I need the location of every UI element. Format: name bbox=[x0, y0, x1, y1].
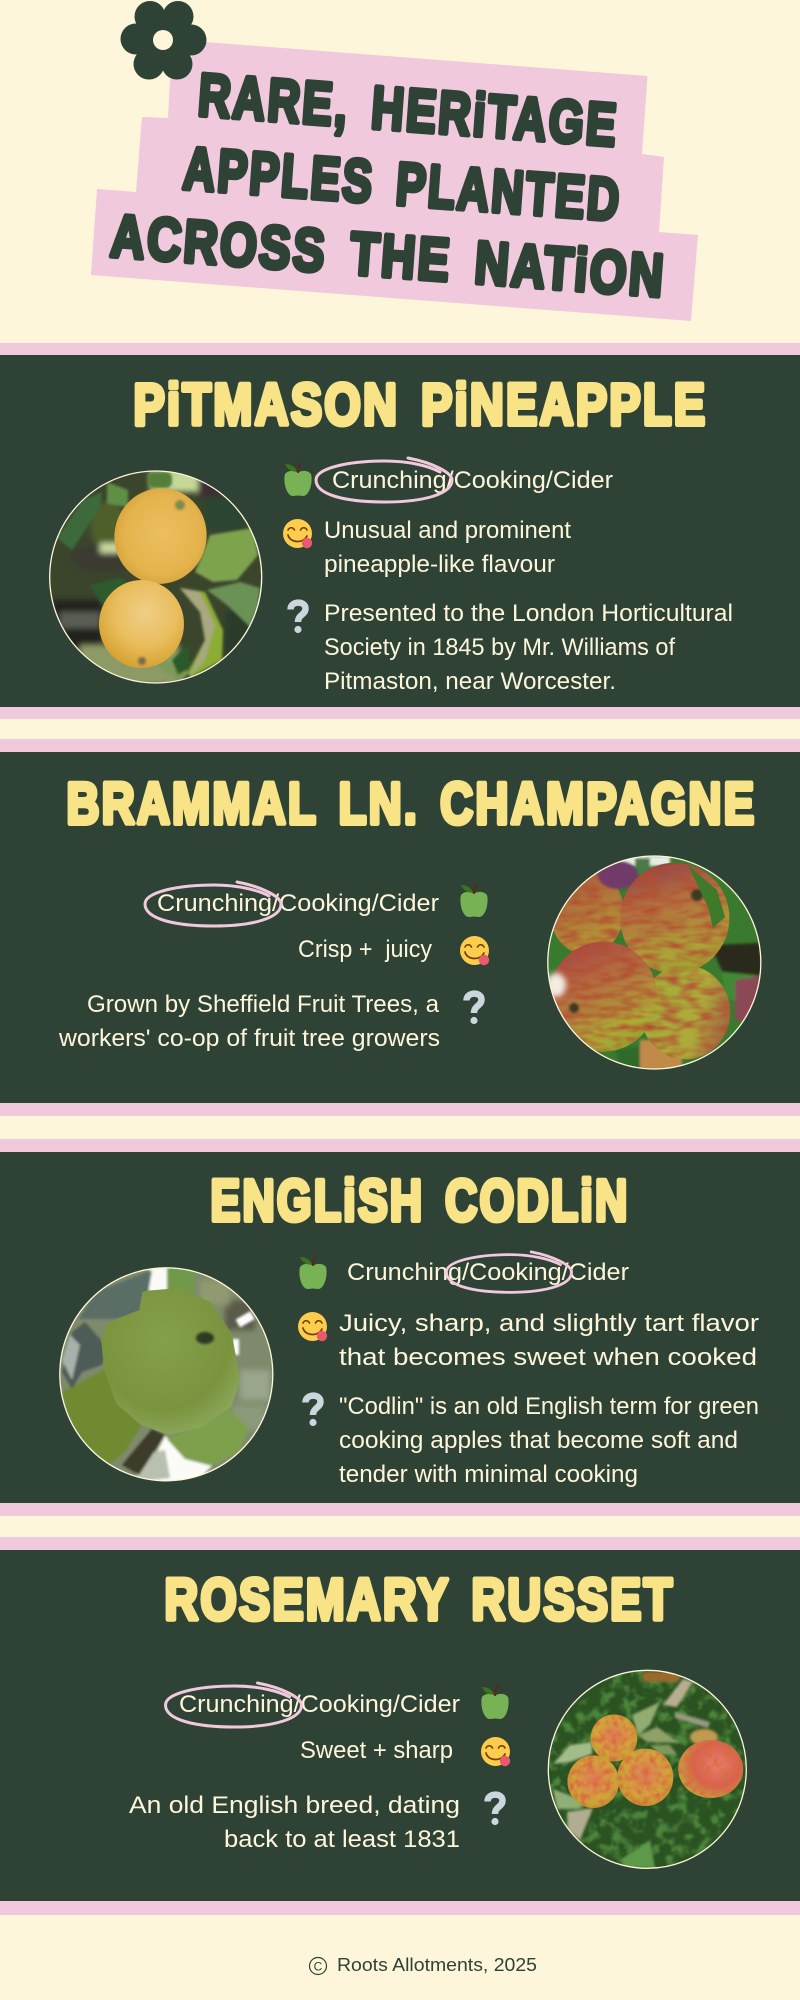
flavour text: that becomes sweet when cooked bbox=[339, 1344, 757, 1371]
flavour text bbox=[324, 517, 571, 578]
flavour text: Sweet + sharp bbox=[300, 1737, 453, 1764]
panel: Pitmason Pineapple bbox=[0, 343, 800, 719]
history text: back to at least 1831 bbox=[224, 1826, 460, 1853]
title text: ACROSS THE NATiON bbox=[109, 202, 668, 310]
footer credit: C bbox=[314, 1960, 323, 1974]
heading: ENGLiSH CODLiN bbox=[210, 1168, 630, 1234]
history text: "Codlin" is an old English term for green bbox=[339, 1393, 759, 1420]
title banner bbox=[91, 1, 698, 321]
history text: tender with minimal cooking bbox=[339, 1461, 638, 1488]
photo: green apple bbox=[59, 1267, 274, 1484]
use circled: Crunching/Cooking/Cider bbox=[332, 467, 613, 494]
icon: tasty face bbox=[298, 1312, 327, 1341]
icon: flower bbox=[120, 1, 206, 80]
banner: pink stepped shape bbox=[91, 42, 698, 321]
photo: yellow apples bbox=[49, 470, 265, 685]
icon: apple bbox=[481, 1686, 509, 1719]
icon: question mark bbox=[290, 603, 306, 633]
use circled bbox=[347, 1252, 629, 1292]
flavour text: Juicy, sharp, and slightly tart flavor bbox=[339, 1310, 759, 1337]
icon: question mark bbox=[488, 1795, 502, 1825]
use circled bbox=[166, 1683, 460, 1727]
flavour text: pineapple-like flavour bbox=[324, 551, 555, 578]
history text: cooking apples that become soft and bbox=[339, 1427, 738, 1454]
title text: APPLES PLANTED bbox=[181, 135, 624, 234]
photo: russet apples on branch bbox=[547, 1669, 748, 1870]
use circled bbox=[316, 458, 613, 502]
history text: An old English breed, dating bbox=[129, 1792, 460, 1819]
history text: Presented to the London Horticultural bbox=[324, 600, 733, 627]
panel: Rosemary Russet bbox=[0, 1537, 800, 1915]
icon: question mark bbox=[466, 994, 482, 1024]
history text: Grown by Sheffield Fruit Trees, a bbox=[87, 991, 440, 1018]
panel: English Codlin bbox=[0, 1139, 800, 1516]
icon: question mark bbox=[306, 1396, 320, 1426]
history text: Pitmaston, near Worcester. bbox=[324, 668, 616, 695]
icon: tasty face bbox=[481, 1737, 510, 1766]
use circled: Crunching/Cooking/Cider bbox=[157, 890, 439, 917]
history text bbox=[58, 991, 440, 1052]
flavour text: Crisp + juicy bbox=[298, 936, 432, 963]
title text bbox=[109, 61, 668, 310]
title text: RARE, HERiTAGE bbox=[196, 61, 621, 159]
history text: workers' co-op of fruit tree growers bbox=[58, 1025, 440, 1052]
icon: tasty face bbox=[283, 519, 312, 548]
panel: Brammal Ln. Champagne bbox=[0, 739, 800, 1116]
flavour text bbox=[339, 1310, 759, 1371]
history text bbox=[339, 1393, 759, 1488]
heading: ROSEMARY RUSSET bbox=[164, 1568, 674, 1632]
photo: red and yellow apples bbox=[546, 855, 765, 1070]
flavour text: Unusual and prominent bbox=[324, 517, 571, 544]
history text bbox=[129, 1792, 460, 1853]
footer credit: Roots Allotments, 2025 bbox=[337, 1955, 537, 1975]
icon: apple bbox=[460, 884, 488, 917]
use circled bbox=[145, 882, 439, 926]
icon: apple bbox=[284, 463, 312, 496]
history text: Society in 1845 by Mr. Williams of bbox=[324, 634, 675, 661]
use circled: Crunching/Cooking/Cider bbox=[179, 1691, 460, 1718]
history text bbox=[324, 600, 733, 695]
icon: tasty face bbox=[460, 936, 489, 965]
use circled: Crunching/Cooking/Cider bbox=[347, 1259, 629, 1286]
icon: apple bbox=[299, 1256, 327, 1289]
